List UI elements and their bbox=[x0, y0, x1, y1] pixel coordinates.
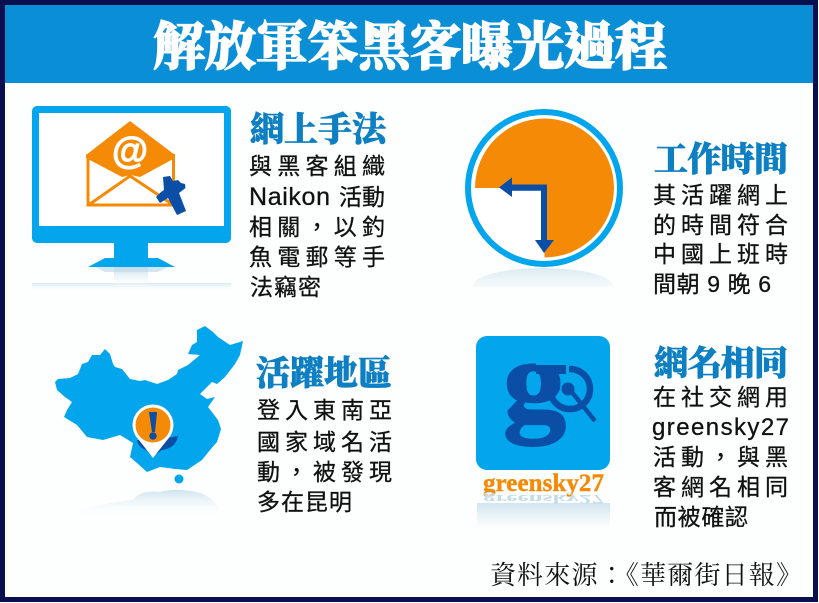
panel: working hours bbox=[468, 112, 788, 307]
icon: greensky27 logo bbox=[476, 315, 610, 527]
body text: 相關，以釣 bbox=[249, 214, 385, 240]
heading: 網上手法 bbox=[250, 111, 390, 149]
heading: 網名相同 bbox=[654, 345, 788, 383]
icon: clock bbox=[468, 112, 620, 307]
icon: greensky27 logo: g bbox=[503, 315, 566, 446]
heading: 活躍地區 bbox=[256, 354, 392, 393]
body text: 活動 bbox=[339, 184, 385, 210]
body text: 與黑客組織 bbox=[249, 153, 385, 179]
body text bbox=[257, 397, 392, 515]
title banner: 解放軍笨黑客曝光過程 bbox=[153, 18, 667, 77]
body text: 國家域名活 bbox=[257, 429, 392, 455]
icon: monitor with email: @ bbox=[112, 130, 148, 171]
body text: 登入東南亞 bbox=[257, 397, 392, 423]
body text bbox=[653, 182, 788, 297]
title banner bbox=[5, 5, 813, 83]
body text: 多在昆明 bbox=[257, 489, 352, 515]
icon: China map with pin bbox=[55, 326, 243, 517]
body text: 中國上班時 bbox=[653, 241, 788, 267]
body text: 而被確認 bbox=[654, 504, 748, 530]
body text bbox=[652, 384, 789, 530]
body text: 客網名相同 bbox=[653, 474, 788, 500]
body text: 在社交網用 bbox=[653, 384, 788, 410]
source credit: 資料來源：《華爾街日報》 bbox=[490, 561, 802, 590]
body text bbox=[249, 153, 385, 300]
icon: monitor with email bbox=[32, 106, 231, 291]
body text: 活動，與黑 bbox=[653, 444, 788, 470]
body text: greensky27 bbox=[652, 414, 789, 441]
icon: greensky27 logo: greensky27 bbox=[483, 470, 604, 497]
icon: greensky27 logo: greensky27 bbox=[483, 492, 604, 506]
panel: online methods bbox=[32, 106, 390, 300]
body text: 間朝 9 晚 6 bbox=[653, 271, 771, 297]
body text: 的時間符合 bbox=[653, 212, 788, 238]
body text: 魚電郵等手 bbox=[249, 244, 385, 270]
body text: 其活躍網上 bbox=[653, 182, 788, 208]
panel: active region bbox=[55, 326, 392, 517]
panel: same username bbox=[476, 315, 789, 530]
body text: Naikon bbox=[249, 183, 330, 211]
body text: 法竊密 bbox=[250, 274, 321, 300]
body text: 動，被發現 bbox=[257, 459, 392, 485]
heading: 工作時間 bbox=[654, 141, 788, 179]
